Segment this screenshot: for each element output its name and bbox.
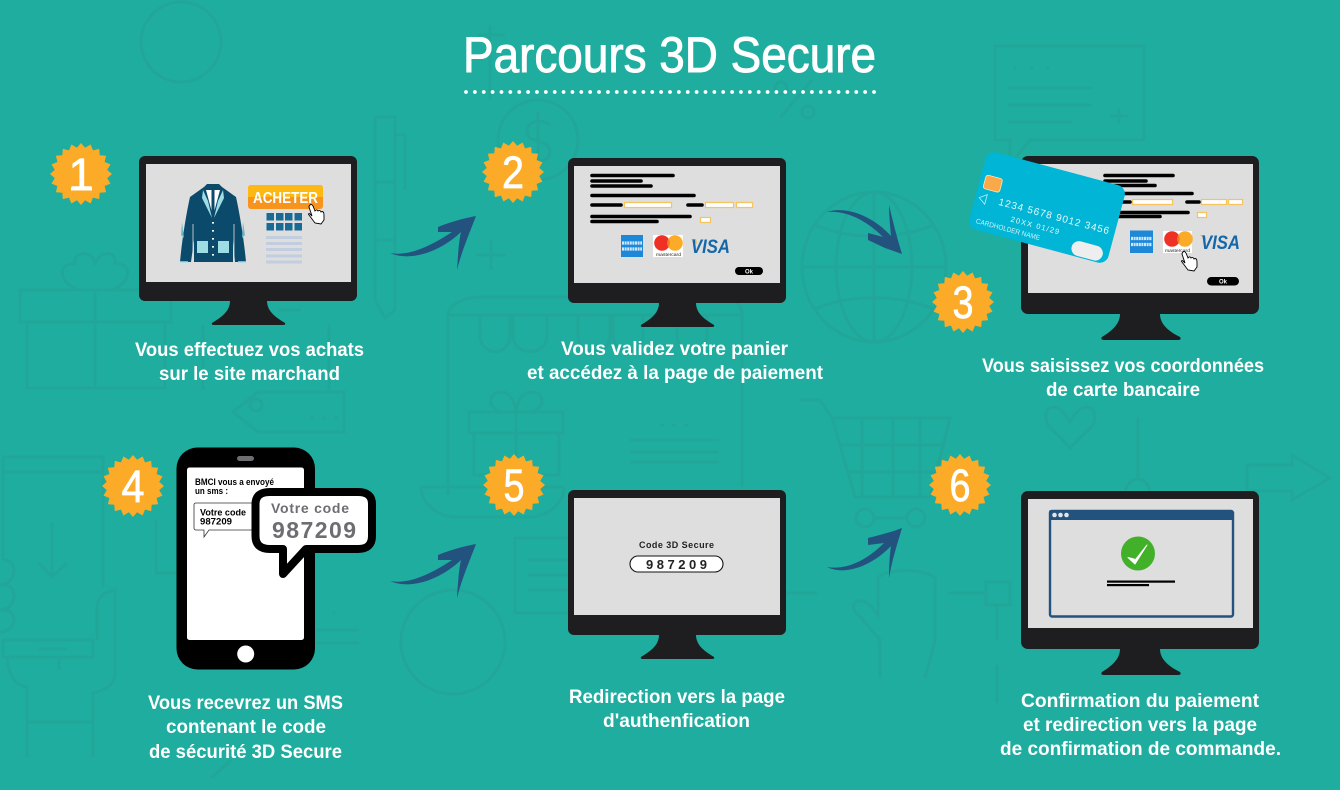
logo: mastercard: mastercard [656,252,681,257]
caption 4: contenant le code [166,717,326,738]
small sms bubble [194,503,256,537]
arrow 4 to 5 [390,544,476,598]
step 6 [929,454,1281,760]
title: Parcours 3D Secure [463,27,876,83]
monitor 3 [1021,156,1259,340]
product description lines [266,236,302,264]
large code bubble: Votre code [271,500,349,516]
payment form lines [592,176,752,222]
caption 3 [982,356,1264,401]
ok button: Ok [745,269,754,275]
caption 2: et accédez à la page de paiement [527,363,824,384]
icon: hand cursor [309,204,324,224]
step 5 [483,454,786,732]
monitor 1 [139,156,357,325]
badge 2 [482,141,544,203]
logo: visa: VISA [1201,233,1240,254]
browser window [1049,510,1233,616]
badge 3 [932,271,994,333]
logo: mastercard [1163,231,1193,253]
badge 6 [929,454,991,516]
monitor 5 [568,490,786,659]
caption 3: Vous saisissez vos coordonnées [982,356,1264,377]
caption 1 [135,340,364,385]
logo: american express [621,235,643,257]
sms text: un sms : [195,486,228,496]
caption 5 [569,687,785,732]
logo: mastercard: mastercard [1165,248,1190,253]
bank card: 1234 5678 9012 3456 [997,197,1111,237]
caption 6: Confirmation du paiement [1021,691,1260,712]
caption 4: Vous recevrez un SMS [148,693,343,714]
large code bubble [256,492,372,574]
button: acheter [248,185,323,209]
icon: jacket [180,184,246,262]
code field: Code 3D Secure [639,540,714,550]
caption 4 [148,693,343,763]
small sms bubble: 987209 [200,516,232,528]
arrow 1 to 2 [390,216,476,270]
caption 2 [527,339,824,384]
icon: green check [1121,536,1155,570]
ok button [1207,277,1239,286]
small sms bubble: Votre code [200,508,246,518]
step 1 [50,143,364,385]
badge 3: 3 [952,277,974,328]
caption 1: sur le site marchand [159,364,340,385]
ok button [735,267,763,275]
smartphone [176,448,315,670]
badge 2: 2 [502,147,524,198]
confirmation lines [1107,580,1175,586]
caption 6: et redirection vers la page [1023,715,1257,736]
sms text: BMCI vous a envoyé [195,477,274,487]
code field [630,540,723,572]
code field: 987209 [646,557,707,572]
badge 4: 4 [122,461,144,512]
caption 5: Redirection vers la page [569,687,785,708]
badge 6: 6 [950,460,970,511]
caption 1: Vous effectuez vos achats [135,340,364,361]
bank card: CARDHOLDER NAME [975,218,1041,242]
sms text [195,477,274,496]
arrow 5 to 6 [827,528,902,578]
caption 5: d'authenfication [603,711,750,732]
caption 6: de confirmation de commande. [1000,739,1281,760]
step 2 [482,141,824,384]
step 4 [102,448,372,763]
badge 5: 5 [504,460,524,511]
badge 4 [102,455,164,517]
payment form lines [1105,176,1242,218]
logo: mastercard [653,235,683,257]
bank card [967,150,1127,265]
step 3 [932,150,1264,401]
caption 6 [1000,691,1281,760]
product grid [266,213,302,230]
logo: american express [1130,230,1153,253]
caption 4: de sécurité 3D Secure [149,742,342,763]
large code bubble: 987209 [272,517,356,543]
badge 5 [483,454,545,516]
button: acheter: ACHETER [253,190,318,207]
ok button: Ok [1219,280,1228,286]
monitor 2 [568,158,786,327]
logo: visa: VISA [691,237,730,258]
caption 2: Vous validez votre panier [561,339,789,360]
arrow 2 to 3 [826,205,902,254]
monitor 6 [1021,491,1259,675]
icon: hand cursor [1182,251,1197,271]
badge 1 [50,143,112,205]
bank card: 20XX 01/29 [1010,215,1060,236]
badge 1: 1 [68,149,94,200]
caption 3: de carte bancaire [1046,380,1200,401]
